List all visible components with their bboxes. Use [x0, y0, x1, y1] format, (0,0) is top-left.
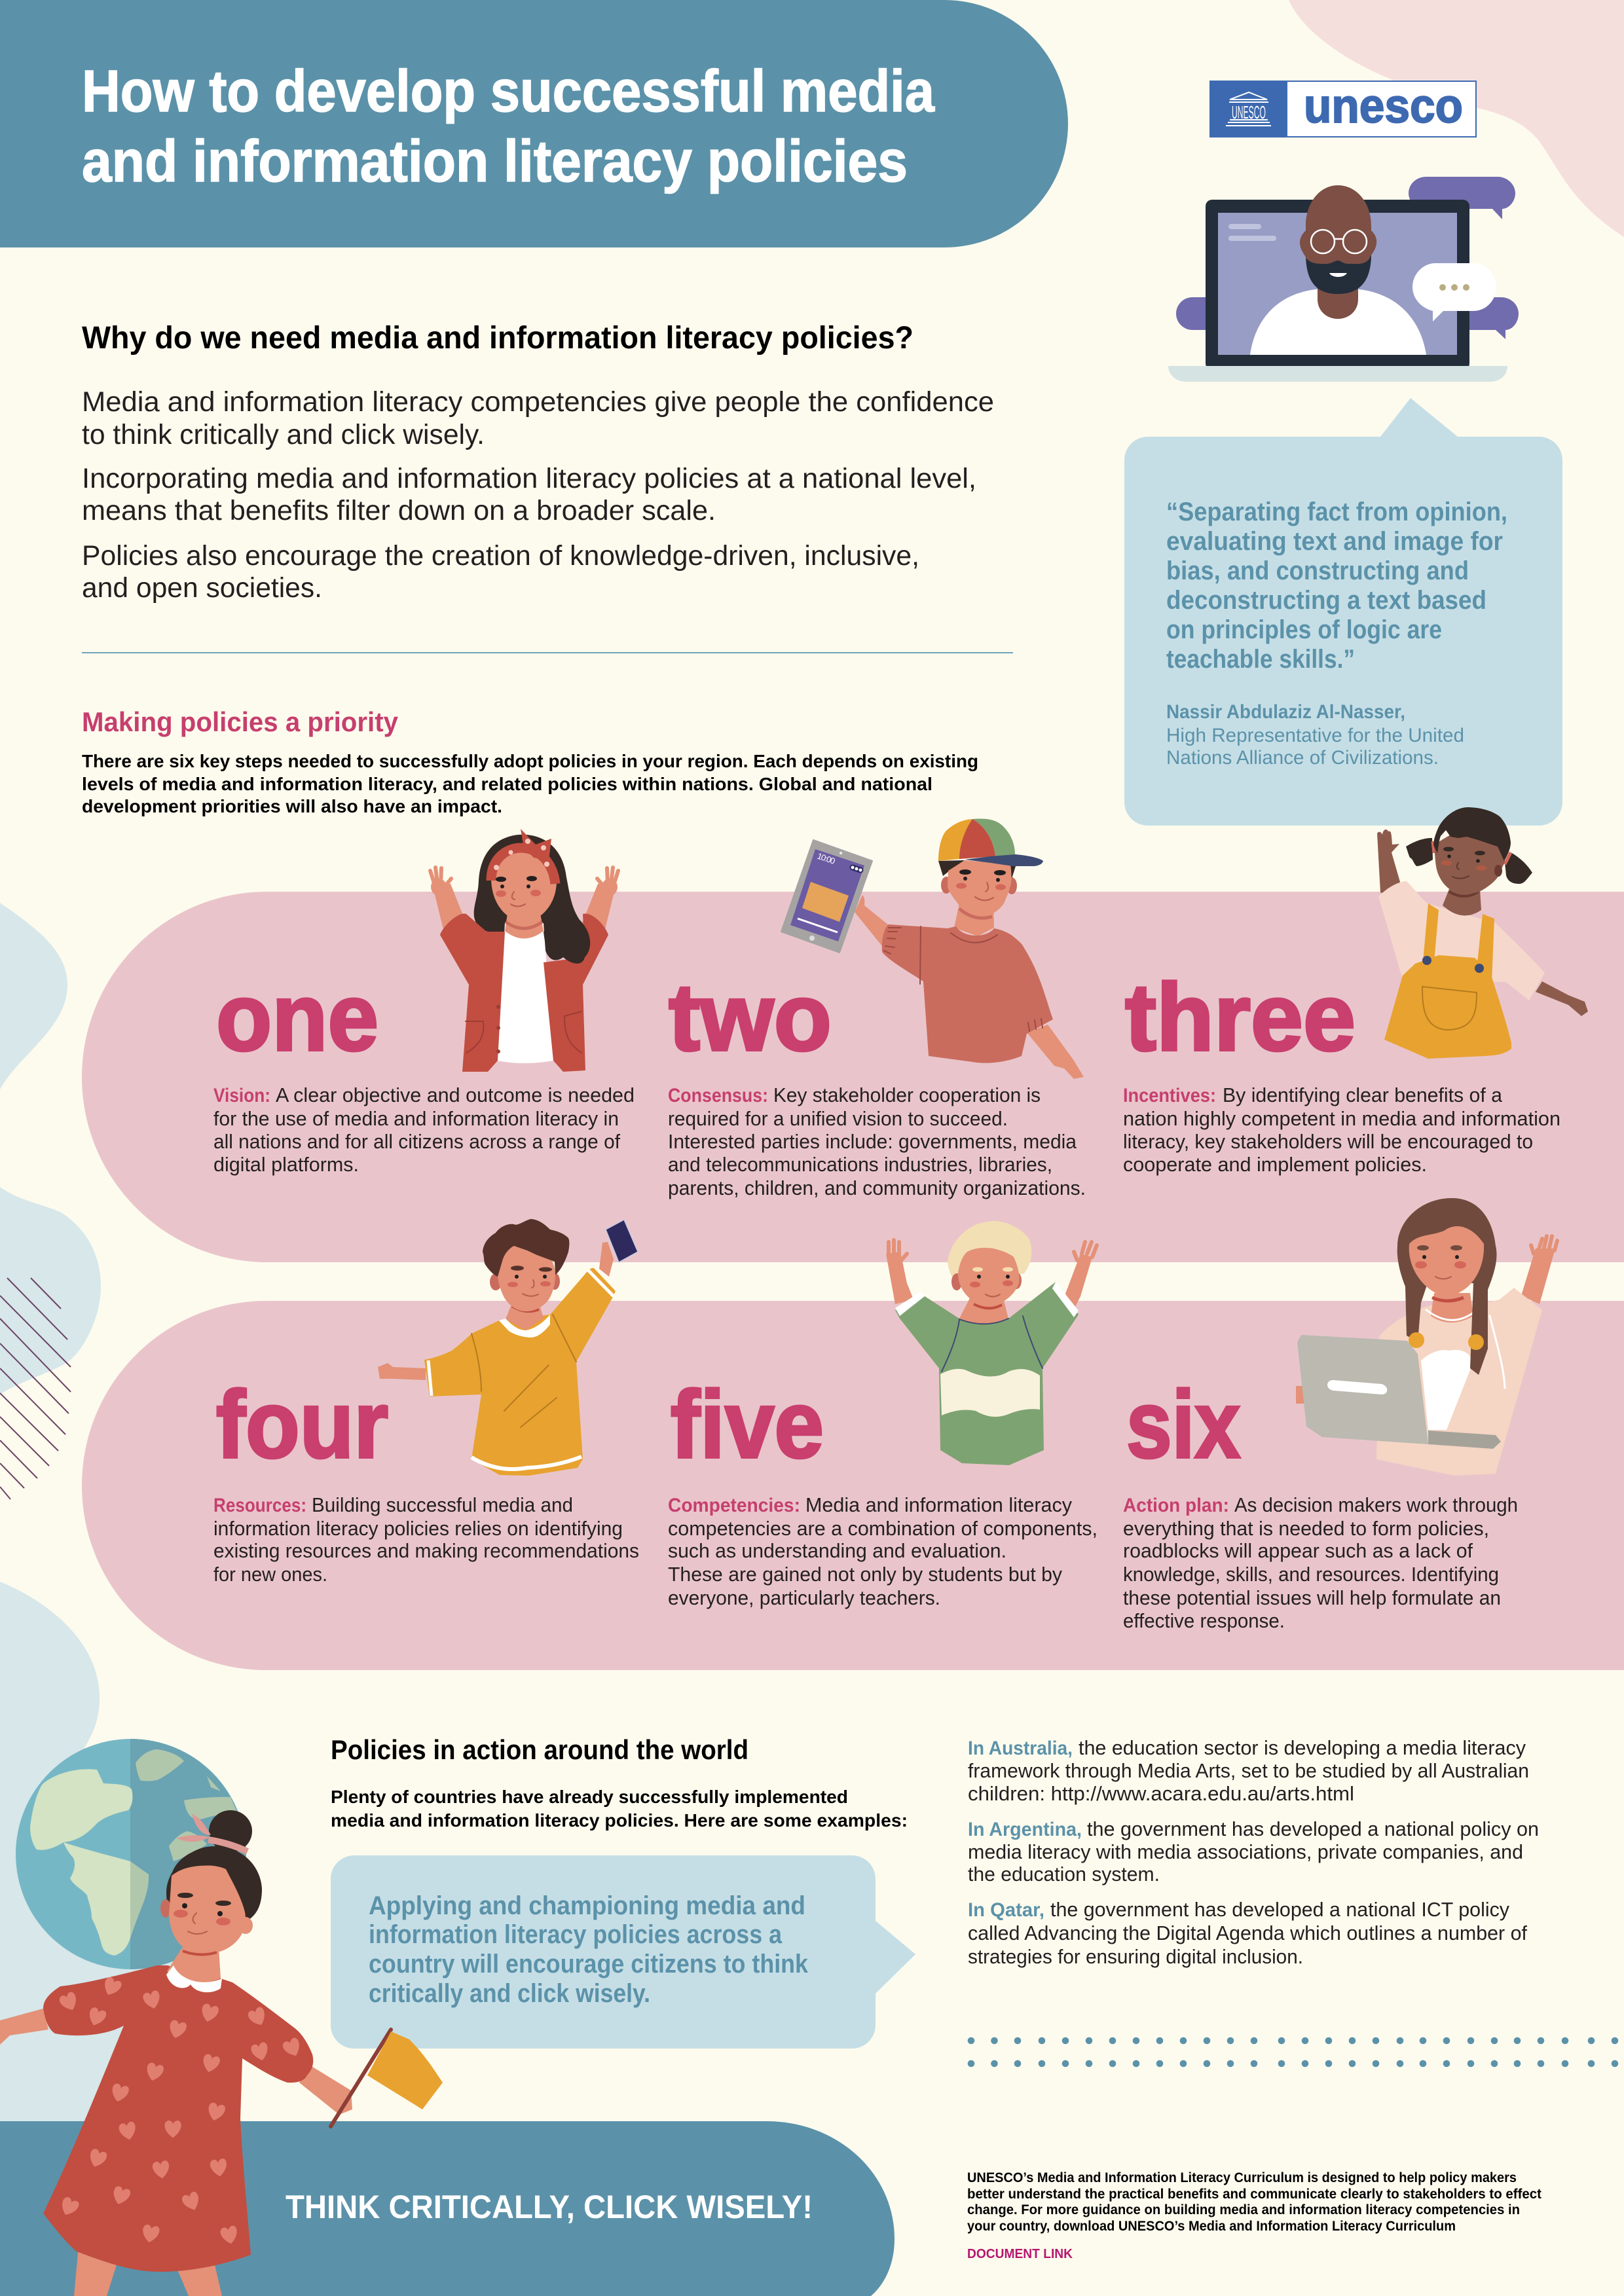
example: Australia	[968, 1736, 1529, 1805]
quote text: teachable skills.”	[1166, 645, 1355, 674]
example: Qatar: In Qatar,	[968, 1899, 1044, 1921]
text block: competencies: Competencies:	[668, 1495, 800, 1516]
quote text: deconstructing a text based	[1166, 586, 1486, 615]
neck	[954, 903, 994, 936]
illustration: boy with phone	[378, 1219, 638, 1476]
text block: incentives: cooperate and implement policies.	[1123, 1153, 1427, 1176]
text block: consensus: required for a unified vision to succeed.	[668, 1107, 1008, 1130]
text block: consensus: Key stakeholder cooperation is	[773, 1084, 1041, 1106]
text block: action plan: effective response.	[1123, 1609, 1285, 1632]
text block: why paragraphs: Media and information literacy competencies give people the confidence	[82, 386, 994, 418]
number: two: two	[669, 964, 832, 1070]
legs	[74, 2246, 222, 2296]
example: Australia: children: http://www.acara.edu.au/arts.html	[968, 1782, 1354, 1805]
text block: incentives: By identifying clear benefits of a	[1223, 1084, 1503, 1106]
text block: consensus: and telecommunications industries, libraries,	[668, 1153, 1052, 1176]
arms	[0, 2009, 48, 2045]
background blob: left middle	[0, 1187, 101, 1394]
hair under cap	[938, 860, 1016, 879]
text block: why paragraphs: to think critically and click wisely.	[82, 419, 485, 450]
shirt	[424, 1268, 616, 1476]
speech bubble: white	[1412, 263, 1496, 321]
step four	[213, 1219, 639, 1586]
callout text: critically and click wisely.	[369, 1979, 650, 2008]
text block: vision: all nations and for all citizens across a range of	[213, 1130, 620, 1153]
dotted lines decoration	[968, 2037, 1618, 2067]
text block: resources	[213, 1493, 639, 1586]
illustration: globe	[16, 1739, 246, 1969]
quote attribution: Nassir Abdulaziz Al-Nasser,	[1166, 701, 1405, 723]
example: Qatar	[968, 1898, 1527, 1968]
text block: vision: A clear objective and outcome is needed	[276, 1084, 635, 1106]
face	[958, 1248, 1020, 1305]
neck	[506, 1303, 544, 1330]
background blob: left upper	[0, 903, 67, 1089]
hair	[1433, 807, 1511, 861]
raised arm	[1377, 829, 1400, 897]
text block: why paragraphs: means that benefits filter down on a broader scale.	[82, 495, 716, 526]
step six	[1123, 1198, 1557, 1632]
text block: incentives: Incentives:	[1123, 1085, 1216, 1106]
footer banner	[0, 2121, 895, 2296]
hatch pattern	[0, 1278, 71, 1499]
icon: unesco temple	[1226, 92, 1271, 126]
dress	[43, 1965, 313, 2272]
text block: action plan: these potential issues will help formulate an	[1123, 1586, 1501, 1609]
logo: unesco	[1209, 80, 1477, 137]
text block: competencies	[668, 1493, 1098, 1609]
background blob: top right pink	[1289, 0, 1624, 237]
text block: why paragraphs: Incorporating media and information literacy policies at a national level,	[82, 463, 976, 494]
wordmark: unesco	[1304, 80, 1463, 133]
face	[498, 1243, 555, 1311]
text block: six key steps intro: There are six key steps needed to successfully adopt policies in your region. Each depends on existing	[82, 751, 978, 771]
link: document link: DOCUMENT LINK	[967, 2247, 1073, 2261]
text block: action plan: knowledge, skills, and resources. Identifying	[1123, 1563, 1499, 1586]
laptop	[1206, 200, 1469, 370]
speech bubble: purple top	[1409, 177, 1515, 219]
lowered arm	[1536, 981, 1588, 1016]
text block: resources: Building successful media and	[312, 1493, 573, 1516]
text block: competencies: Media and information literacy	[805, 1493, 1072, 1516]
shirt	[1378, 881, 1545, 1000]
illustration: girl in overalls	[1377, 807, 1588, 1059]
illustration: girl with laptop	[1296, 1198, 1557, 1476]
facial features	[959, 869, 971, 875]
quote text: evaluating text and image for	[1166, 527, 1503, 556]
text block: vision	[213, 1084, 635, 1176]
number: three: three	[1125, 964, 1356, 1070]
head	[160, 1810, 262, 1992]
text block: consensus	[668, 1084, 1086, 1199]
collar	[499, 1315, 550, 1338]
text block: resources: for new ones.	[213, 1563, 327, 1586]
text block: footer note: change. For more guidance on building media and information literacy competencies in	[967, 2202, 1520, 2217]
speech bubble: purple left	[1176, 297, 1242, 330]
text block: consensus: Consensus:	[668, 1085, 768, 1106]
text block: competencies: everyone, particularly teachers.	[668, 1586, 940, 1609]
text block: footer note	[967, 2170, 1541, 2234]
example: Australia: In Australia,	[968, 1738, 1073, 1759]
hand left	[378, 1363, 426, 1380]
text block: resources: information literacy policies relies on identifying	[213, 1517, 623, 1540]
phone and hand	[599, 1242, 614, 1277]
heading: policies in action: Policies in action around the world	[331, 1734, 748, 1765]
icon: tablet	[781, 840, 872, 953]
step three	[1123, 807, 1588, 1176]
text block: action plan: roadblocks will appear such as a lack of	[1123, 1539, 1473, 1562]
text block: resources: Resources:	[213, 1495, 306, 1516]
quote text: on principles of logic are	[1166, 615, 1442, 644]
text block: footer note: better understand the practical benefits and communicate clearly to stakeholders to effect	[967, 2187, 1541, 2202]
step two	[668, 819, 1086, 1199]
text block: competencies: such as understanding and evaluation.	[668, 1539, 1006, 1562]
face	[948, 860, 1011, 917]
text block: footer note: your country, download UNESCO’s Media and Information Literacy Curriculum	[967, 2219, 1456, 2234]
quote text: “Separating fact from opinion,	[1166, 498, 1507, 526]
text block: action plan: As decision makers work through	[1234, 1493, 1518, 1516]
cap	[938, 819, 972, 861]
text block: competencies: competencies are a combination of components,	[668, 1517, 1098, 1540]
hearts	[58, 1976, 304, 2246]
quote text: bias, and constructing and	[1166, 556, 1469, 585]
panel: band steps one to three	[82, 892, 1624, 1262]
callout text: information literacy policies across a	[369, 1920, 783, 1949]
background blob: left lower	[0, 1582, 196, 2121]
text block: vision: digital platforms.	[213, 1153, 359, 1176]
text block: vision: for the use of media and information literacy in	[213, 1107, 619, 1130]
illustration: boy with tablet	[781, 819, 1084, 1079]
heading: making policies a priority: Making policies a priority	[82, 706, 399, 737]
example: Australia: framework through Media Arts, set to be studied by all Australian	[968, 1759, 1529, 1782]
text block: why paragraphs: Policies also encourage the creation of knowledge-driven, inclusive,	[82, 540, 919, 572]
ribbon	[177, 1814, 211, 1842]
speech bubble: purple right	[1441, 297, 1519, 339]
quote attribution: Nations Alliance of Civilizations.	[1166, 747, 1439, 769]
text block: why paragraphs	[82, 386, 994, 604]
number: four: four	[216, 1371, 388, 1478]
panel: callout bubble	[331, 1855, 915, 2049]
example: Qatar: called Advancing the Digital Agenda which outlines a number of	[968, 1922, 1527, 1944]
title: How to develop successful media	[82, 59, 935, 124]
flag	[331, 2030, 443, 2126]
heading: why: Why do we need media and information literacy policies?	[82, 321, 913, 355]
example: Argentina: the education system.	[968, 1863, 1160, 1886]
text block: resources: existing resources and making recommendations	[213, 1539, 639, 1562]
text block: action plan: everything that is needed to form policies,	[1123, 1517, 1489, 1540]
example: Argentina: media literacy with media associations, private companies, and	[968, 1840, 1523, 1863]
step one	[213, 829, 635, 1176]
face	[1434, 825, 1505, 894]
example: Argentina	[968, 1817, 1539, 1886]
illustration: man on laptop	[1168, 177, 1519, 382]
illustration: girl with flag	[0, 1810, 443, 2296]
neck	[1443, 889, 1481, 916]
panel: quote bubble	[1124, 398, 1562, 826]
text block: policies intro: media and information literacy policies. Here are some examples:	[331, 1810, 908, 1831]
text block: consensus: parents, children, and community organizations.	[668, 1176, 1086, 1199]
quote text	[1166, 498, 1507, 674]
header banner	[0, 0, 1068, 247]
callout text: country will encourage citizens to think	[369, 1950, 809, 1978]
step five	[668, 1221, 1098, 1609]
example: Qatar: the government has developed a national ICT policy	[1050, 1898, 1509, 1921]
text block: action plan	[1123, 1493, 1518, 1632]
text block: incentives: nation highly competent in media and information	[1123, 1107, 1560, 1130]
text block: footer note: UNESCO’s Media and Information Literacy Curriculum is designed to help policy makers	[967, 2170, 1517, 2185]
hair	[948, 1221, 1031, 1280]
text block: six key steps intro: development priorities will also have an impact.	[82, 796, 502, 816]
example: Australia: the education sector is developing a media literacy	[1079, 1736, 1526, 1759]
man	[1250, 289, 1426, 355]
text block: policies intro: Plenty of countries have already successfully implemented	[331, 1787, 848, 1807]
hair	[483, 1219, 569, 1277]
overalls	[1422, 903, 1494, 982]
text block: consensus: Interested parties include: governments, media	[668, 1130, 1077, 1153]
callout text	[369, 1891, 809, 2008]
text block: competencies: These are gained not only by students but by	[668, 1563, 1062, 1586]
text block: country examples	[968, 1736, 1539, 1968]
text block: six key steps intro: levels of media and information literacy, and related policies within nations. Global and national	[82, 774, 932, 794]
text block: incentives: literacy, key stakeholders will be encouraged to	[1123, 1130, 1533, 1153]
text block: why paragraphs: and open societies.	[82, 572, 322, 604]
icon: tablet: 10:00	[816, 851, 836, 866]
number: six: six	[1126, 1371, 1240, 1478]
arm left	[855, 895, 889, 946]
slogan: THINK CRITICALLY, CLICK WISELY!	[286, 2189, 813, 2225]
text block: vision: Vision:	[213, 1085, 270, 1106]
icon: unesco temple: UNESCO	[1232, 102, 1266, 122]
quote attribution: High Representative for the United	[1166, 725, 1464, 746]
text block: six key steps intro	[82, 751, 978, 816]
example: Argentina: the government has developed a national policy on	[1087, 1817, 1539, 1840]
example: Qatar: strategies for ensuring digital inclusion.	[968, 1945, 1303, 1968]
text block: action plan: Action plan:	[1123, 1495, 1229, 1516]
number: five: five	[671, 1371, 824, 1478]
text block: policies intro	[331, 1787, 908, 1831]
arm right	[1027, 1025, 1084, 1079]
number: one: one	[216, 964, 378, 1070]
example: Argentina: In Argentina,	[968, 1819, 1082, 1840]
quote attribution	[1166, 701, 1464, 769]
illustration: woman with headband	[430, 829, 618, 1072]
title: and information literacy policies	[82, 129, 908, 194]
shirt	[882, 924, 1053, 1063]
title	[82, 59, 935, 194]
pigtails	[1406, 838, 1433, 866]
ears	[490, 1273, 502, 1290]
panel: band steps four to six	[82, 1301, 1624, 1670]
callout text: Applying and championing media and	[369, 1891, 805, 1920]
illustration: blond boy	[886, 1221, 1097, 1465]
text block: incentives	[1123, 1084, 1560, 1176]
